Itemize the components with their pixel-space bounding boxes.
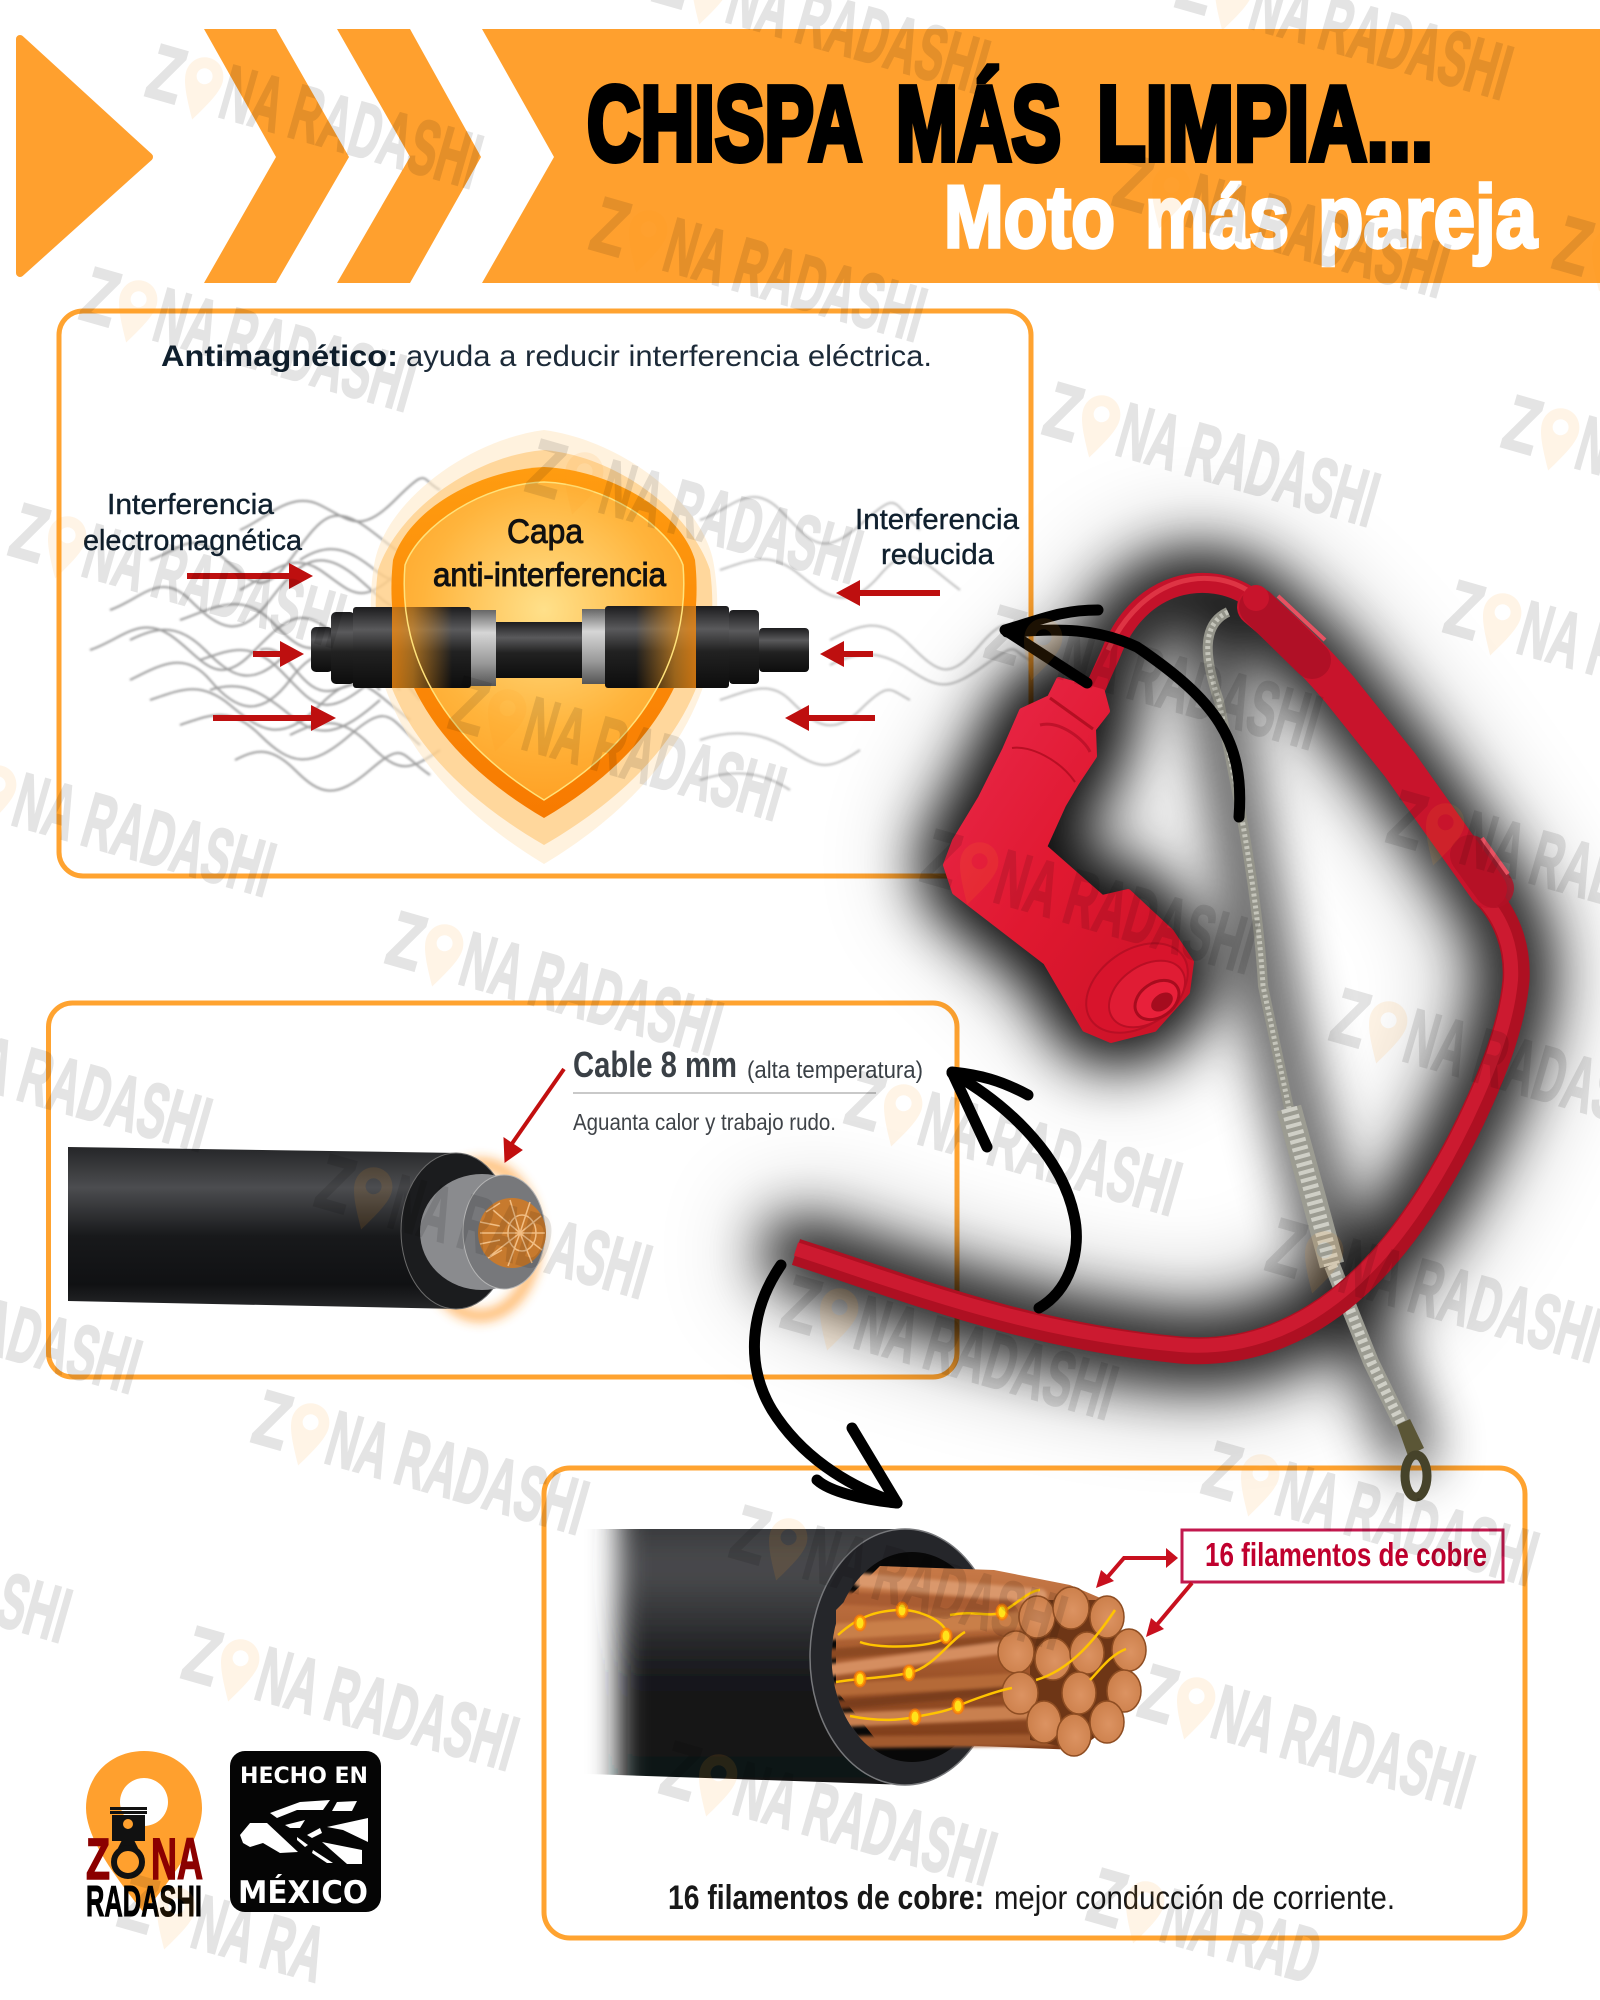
cable spec text: Aguanta calor y trabajo rudo.: [573, 1109, 836, 1135]
watermark layer: NA RADASHI: [910, 1075, 1190, 1233]
watermark layer: Z: [518, 422, 575, 516]
watermark layer: Z: [1194, 1424, 1251, 1518]
title line 2: Moto: [944, 167, 1115, 266]
watermark layer: NA RADASHI: [795, 1509, 1075, 1667]
hand-drawn arrow to antimagnetic panel: [1005, 610, 1240, 817]
title line 2: pareja: [1318, 167, 1538, 266]
watermark layer: Z: [244, 1373, 301, 1467]
panel heading: ayuda a reducir interferencia eléctrica.: [406, 340, 932, 373]
watermark layer: Z: [1, 486, 58, 580]
logo piston: [110, 1807, 147, 1876]
title line 2: [944, 167, 1538, 266]
watermark layer: NA RADASHI: [247, 1630, 527, 1788]
logo wordmark: [86, 1827, 203, 1926]
watermark layer: NA RADASHI: [986, 833, 1266, 991]
watermark layer: NA RADASHI: [74, 507, 354, 665]
watermark layer: NA RADASHI: [725, 1745, 1005, 1903]
watermark layer: Z: [1258, 1201, 1315, 1295]
watermark layer: Z: [913, 812, 970, 906]
watermark layer: Z: [1035, 365, 1092, 459]
watermark layer: NA RADASHI: [1050, 609, 1330, 767]
label: interferencia electromagnética: electromagnética: [83, 525, 303, 557]
watermark layer: Z: [722, 1488, 779, 1582]
label: interferencia reducida: reducida: [881, 539, 995, 571]
hand-drawn arrow to filament panel: [754, 1265, 897, 1503]
caption: 16 filamentos de cobre:: [668, 1879, 984, 1917]
watermark layer: Z: [1436, 563, 1493, 657]
badge eagle icon: [240, 1800, 368, 1864]
title line 2: más: [1145, 167, 1289, 266]
shield overlay rim: [392, 482, 696, 800]
watermark layer: NA RADASHI: [514, 680, 794, 838]
caption: mejor conducción de corriente.: [994, 1879, 1395, 1916]
watermark layer: Z: [72, 250, 129, 344]
current sparks: [836, 1590, 1126, 1724]
banner bar: [482, 29, 1600, 283]
panel heading: Antimagnético:: [161, 340, 398, 373]
red arrows pointing to the shaft: [187, 563, 940, 731]
watermark layer: NA RADASHI: [4, 756, 284, 914]
camshaft: [311, 606, 809, 688]
shield label: anti-interferencia: [433, 556, 667, 593]
label: interferencia reducida: [855, 504, 1020, 571]
silicone boot sleeve: [1243, 585, 1508, 889]
watermark layer: Z: [138, 27, 195, 121]
watermark layer: NA RADASHI: [451, 915, 731, 1073]
callout: 16 filamentos de cobre: [1182, 1530, 1503, 1582]
panel: antimagnético: [59, 311, 1031, 876]
watermark layer: NA RADASHI: [1108, 386, 1388, 544]
watermark layer: NA RADASHI: [317, 1394, 597, 1552]
title line 1: CHISPA: [587, 65, 862, 183]
label: interferencia electromagnética: Interferencia: [107, 489, 275, 521]
callout: 16 filamentos de cobre: 16 filamentos de cobre: [1205, 1536, 1487, 1573]
banner chevron 1: [204, 29, 349, 283]
watermark layer: Z: [1079, 1851, 1136, 1945]
red wire: [796, 578, 1516, 1351]
title line 1: LIMPIA...: [1097, 65, 1433, 183]
spark plug cap: [946, 680, 1205, 1051]
cable cutaway illustration: [68, 1147, 546, 1316]
interference waves right: [700, 497, 1030, 790]
wide soft photo shadow: [796, 586, 1516, 1351]
watermark layer: Z: [1379, 773, 1436, 867]
hand-drawn arrow to cable panel: [952, 1072, 1076, 1308]
callout arrows: [1096, 1548, 1192, 1637]
watermark layer: Z: [837, 1054, 894, 1148]
badge: hecho en méxico: [230, 1751, 381, 1912]
banner chevron 2: [337, 29, 481, 283]
interference waves left: [90, 478, 440, 791]
ring terminal: [1397, 1419, 1427, 1497]
panel: 16 filamentos: [544, 1468, 1525, 1938]
watermark layer: Z: [582, 180, 639, 274]
caption: [668, 1879, 1395, 1917]
panel: cable 8 mm: [48, 1003, 957, 1377]
title line 1: [587, 65, 1433, 183]
watermark layer: Z: [110, 1857, 167, 1951]
watermark layer: Z: [307, 1137, 364, 1231]
shield: [371, 430, 717, 864]
watermark layer: NA RADASHI: [145, 271, 425, 429]
shield label: Capa: [507, 513, 583, 551]
watermark layer: Z: [1130, 1647, 1187, 1741]
label: interferencia electromagnética: [83, 489, 303, 557]
ground braid: [1208, 612, 1401, 1423]
watermark layer: NA RADASHI: [380, 1158, 660, 1316]
watermark layer: NA RADASHI: [846, 1279, 1126, 1437]
spark plug wire photo shadow: [796, 586, 1516, 1450]
watermark layer: Z: [441, 659, 498, 753]
title banner: [20, 29, 1600, 283]
logo wordmark: NA: [151, 1827, 203, 1892]
badge: hecho en méxico: MÉXICO: [238, 1875, 368, 1911]
cable spec text: Cable 8 mm: [573, 1044, 737, 1085]
watermark layer: NA RADASHI: [591, 443, 871, 601]
watermark layer: NA RADASHI: [655, 201, 935, 359]
panel heading: [161, 340, 932, 373]
watermark layer: Z: [652, 1724, 709, 1818]
label: interferencia reducida: Interferencia: [855, 504, 1020, 536]
watermark layer: Z: [773, 1258, 830, 1352]
watermark layer: Z: [174, 1609, 231, 1703]
watermark layer: Z: [1322, 971, 1379, 1065]
ignition wire photo: [754, 578, 1516, 1503]
cable spec text: [573, 1044, 923, 1135]
logo pin: [86, 1751, 202, 1913]
watermark layer: Z: [378, 894, 435, 988]
banner triangle: [20, 39, 149, 273]
logo wordmark: Z: [86, 1827, 110, 1892]
watermark layer: Z: [977, 588, 1034, 682]
watermark layer: Z: [1494, 378, 1551, 472]
logo: zona radashi: [86, 1751, 203, 1926]
title line 1: MÁS: [896, 65, 1061, 183]
watermark layer: NA RADASHI: [211, 48, 491, 206]
shield label: [433, 513, 667, 593]
badge: hecho en méxico: HECHO EN: [240, 1764, 368, 1789]
cable spec text: (alta temperatura): [747, 1057, 923, 1084]
copper cable illustration: [594, 1528, 1147, 1786]
pointer arrow: [504, 1069, 564, 1162]
logo wordmark: RADASHI: [86, 1877, 202, 1926]
watermark layer: Z: [1105, 136, 1162, 230]
